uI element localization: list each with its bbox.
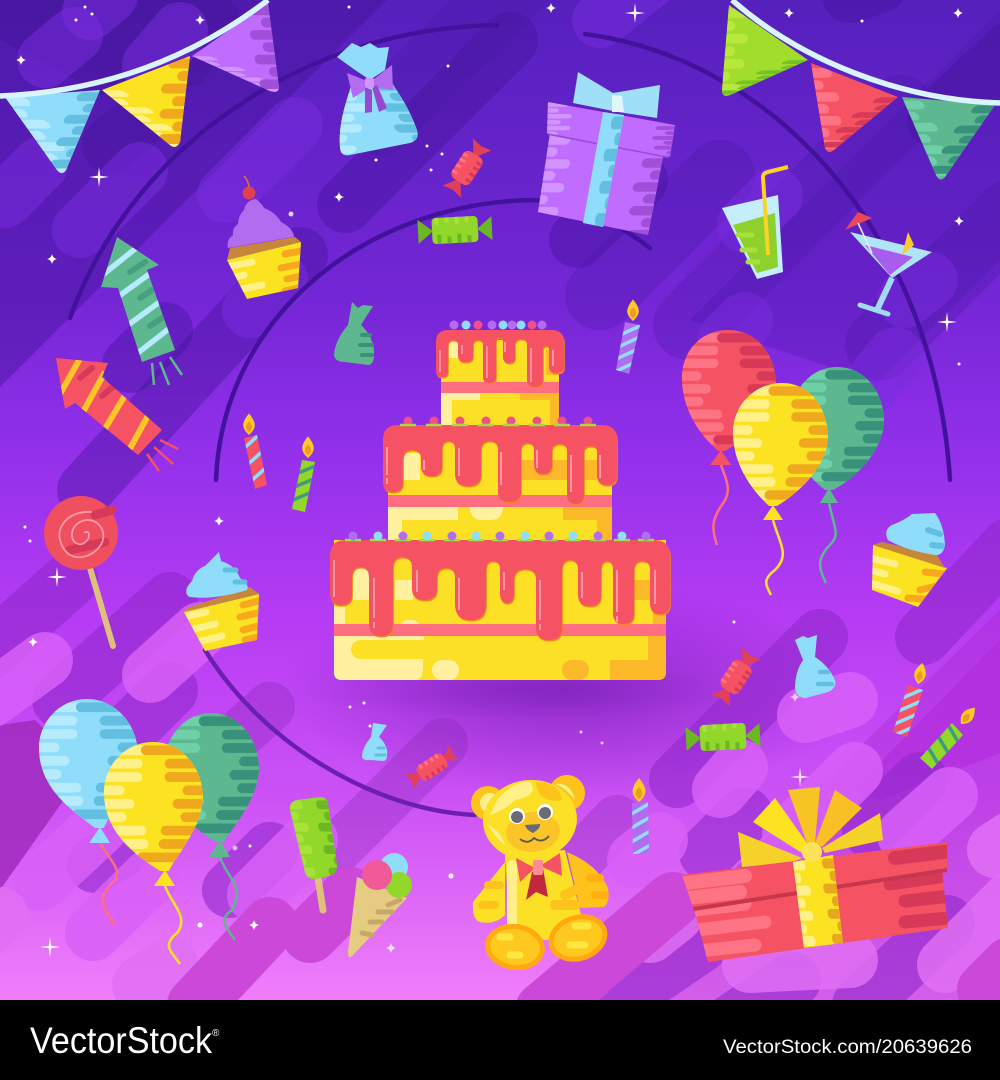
footer url: VectorStock.com/20639626 <box>723 1037 972 1058</box>
decorative circle arcs <box>70 25 950 815</box>
cake tier bottom <box>330 532 671 680</box>
body markings <box>512 865 575 925</box>
face <box>504 804 562 855</box>
candy green top <box>417 215 493 245</box>
flag blue <box>6 90 100 173</box>
rope <box>0 0 268 96</box>
flag lime <box>722 5 808 96</box>
balloon green <box>168 713 259 941</box>
teddy bear <box>471 775 614 974</box>
candy red top <box>443 139 491 197</box>
small candy bag <box>362 723 387 761</box>
flag green <box>902 97 995 180</box>
candy bag blue right <box>795 635 835 698</box>
candle red right <box>893 663 926 737</box>
candle green right <box>920 708 975 769</box>
rocket green <box>100 237 182 385</box>
balloon green <box>800 367 884 584</box>
candy bag blue <box>337 43 418 156</box>
balloons left <box>38 699 259 965</box>
cake shadow <box>300 660 740 720</box>
cocktail <box>845 212 932 314</box>
cake tier middle <box>383 416 618 540</box>
ice cream cone <box>348 853 412 957</box>
flag yellow <box>102 56 190 147</box>
head <box>480 776 580 864</box>
rocket red <box>56 355 178 471</box>
bunting left <box>0 0 302 173</box>
birthday cake <box>330 320 671 680</box>
flag purple <box>192 4 279 92</box>
cake tier top <box>436 320 565 425</box>
footer bar <box>0 1000 1000 1080</box>
candle green left <box>292 436 315 512</box>
ears <box>471 775 585 820</box>
candy red right <box>712 648 760 706</box>
popsicle <box>290 797 337 914</box>
feet <box>482 907 614 974</box>
bunting right <box>695 0 1000 180</box>
candle top right <box>616 300 640 374</box>
candy green right <box>685 722 761 752</box>
balloon yellow left <box>104 742 203 965</box>
cupcake purple <box>227 176 301 299</box>
flag red <box>811 63 898 152</box>
cupcake left <box>180 552 262 651</box>
arms <box>473 852 608 923</box>
gift purple <box>538 72 675 235</box>
juice glass <box>722 167 788 279</box>
bow <box>516 853 562 900</box>
small candy red <box>405 745 459 789</box>
candy bag green <box>334 302 374 365</box>
gift red <box>670 787 960 962</box>
rope <box>732 0 1000 103</box>
footer logo: VectorStock <box>30 1020 212 1061</box>
candle red left <box>243 414 267 489</box>
cupcake right <box>872 513 947 607</box>
lollipop <box>44 496 118 646</box>
balloons right <box>682 330 884 596</box>
balloon yellow <box>733 383 828 596</box>
candle middle <box>632 778 649 854</box>
body <box>505 850 581 940</box>
balloon blue <box>38 699 138 926</box>
footer registered mark: ® <box>212 1028 220 1039</box>
balloon red <box>682 330 776 546</box>
